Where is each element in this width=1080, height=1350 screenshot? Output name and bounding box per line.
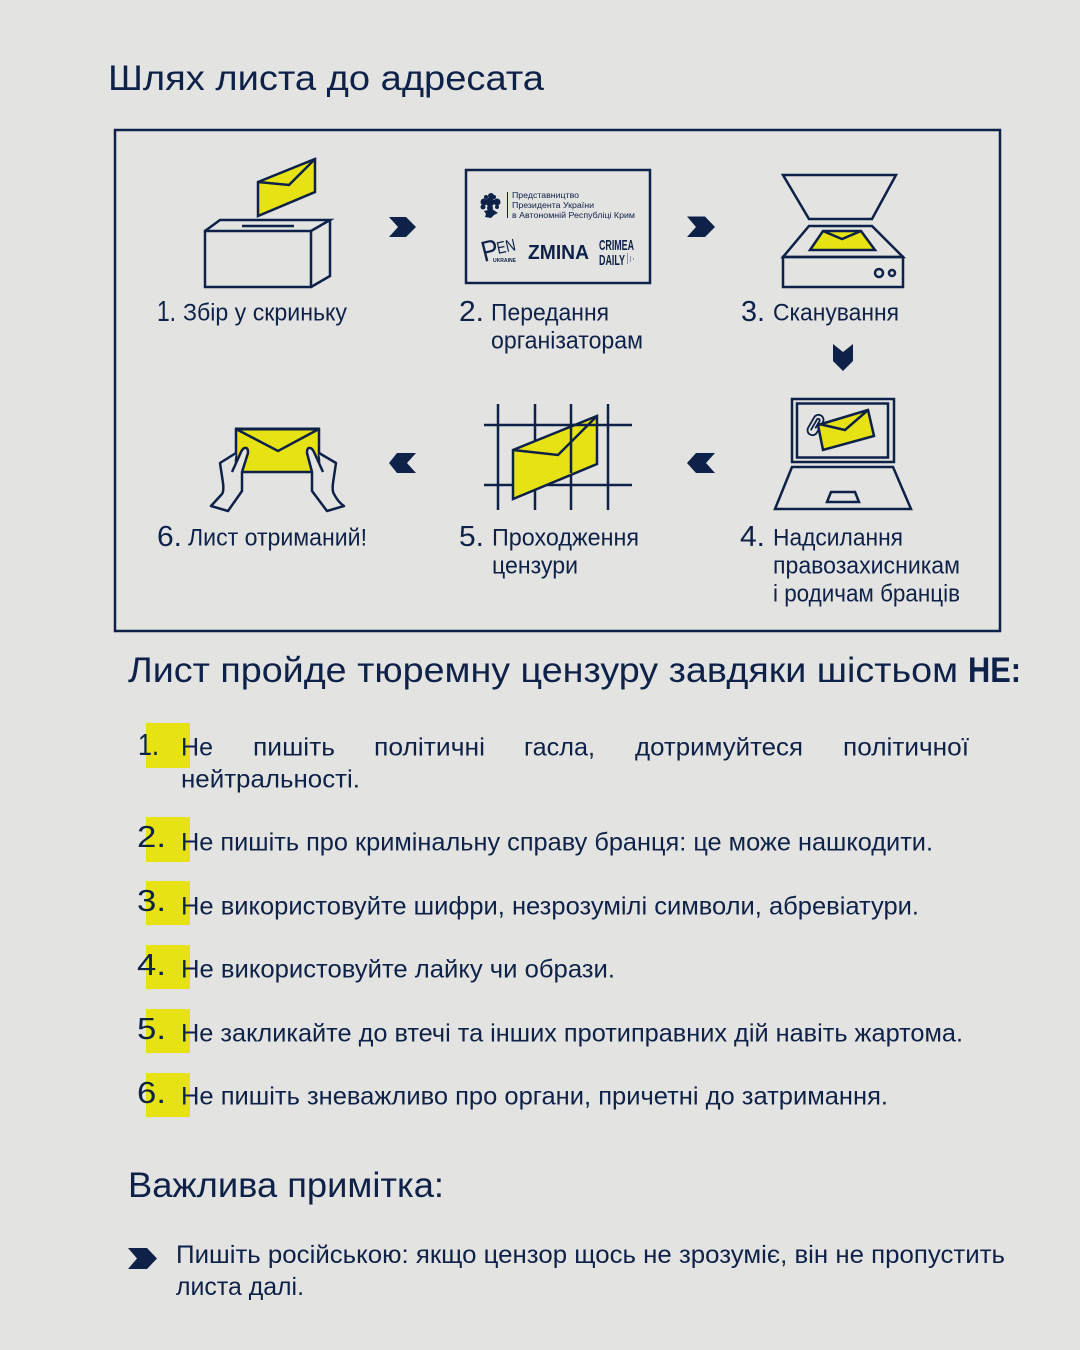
logo: Crimea Daily [599,237,634,269]
rule 1 [138,723,969,794]
rule 4 [137,945,615,989]
rule 6: Не пишіть зневажливо про органи, причетні до затримання. [181,1082,888,1110]
logo panel: organizers [466,170,650,283]
rule 1: нейтральності. [181,766,360,794]
logo: Crimea Daily: CRIMEA [599,237,634,254]
arrow: note bullet [128,1248,157,1269]
arrow: step 5 to 6 [389,453,416,473]
step 1 label: 1. [157,296,176,328]
rule 2: Не пишіть про кримінальну справу бранця: це може нашкодити. [181,828,933,856]
step 2 label [459,296,643,354]
heading: six rules: НЕ: [968,651,1021,690]
rule 3: Не використовуйте шифри, незрозумілі символи, абревіатури. [181,892,919,920]
rule 1: 1. [138,727,159,762]
step 4 label: правозахисникам [773,552,960,580]
step 4 label: 4. [740,521,765,553]
arrow: step 3 to 4 [833,344,853,371]
icon: scanner [783,175,903,287]
step 4 label: і родичам бранців [773,580,960,608]
panel: letter path [115,130,1000,631]
note text [176,1241,1005,1301]
title: Шлях листа до адресата [108,59,545,98]
step 2 label: Передання [491,300,609,326]
arrow: step 1 to 2 [389,217,416,237]
step 4 label: Надсилання [773,524,903,552]
rule 4: Не використовуйте лайку чи образи. [181,956,615,984]
rule 6 [137,1073,888,1117]
rule 5: 5. [137,1011,166,1046]
rule 2: 2. [137,819,166,854]
logo: representation emblem [480,193,500,218]
icon: envelope behind censorship grid [484,404,632,510]
logo: Crimea Daily: DAILY [599,252,625,269]
logo: ZMINA: ZMINA [528,242,589,264]
step 5 label: 5. [459,521,484,553]
step 3 label: Сканування [773,300,899,326]
step 2 label: організаторам [491,328,643,354]
rule 1: гасла, [524,734,595,762]
step 3 label [741,296,899,328]
step 5 label [459,521,639,580]
step 6 label: Лист отриманий! [188,524,367,552]
step 3 label: 3. [741,296,765,328]
logo: PEN Ukraine: UKRAINE [493,258,517,264]
arrow: step 2 to 3 [687,216,715,237]
step 5 label: цензури [492,552,578,580]
step 5 label: Проходження [492,524,639,552]
note text: листа далі. [176,1273,304,1301]
logo text: representation [512,191,635,220]
rule 6: 6. [137,1075,166,1110]
rule 3: 3. [137,883,166,918]
logo text: representation: Представництво [512,191,580,200]
rule 1: політичні [374,734,485,762]
icon: ballot box with envelope [205,159,330,287]
step 6 label [157,521,367,553]
logo: PEN Ukraine: EN [495,235,517,258]
logo: PEN Ukraine [478,234,517,269]
rule 2 [137,817,933,862]
step 6 label: 6. [157,521,182,553]
rule 4: 4. [137,947,166,982]
heading: important note: Важлива примітка: [128,1166,444,1205]
step 4 label [740,521,960,608]
rule 1: Не [181,734,213,762]
step 2 label: 2. [459,296,484,328]
logo text: representation: Президента України [512,201,594,210]
rule 5: Не закликайте до втечі та інших протиправних дій навіть жартома. [181,1020,963,1048]
arrow: step 4 to 5 [687,453,715,473]
icon: hands holding envelope [211,429,344,511]
rule 5 [137,1009,963,1053]
rule 1: пишіть [253,734,335,762]
rule 1: політичної [843,734,969,762]
rule 1: дотримуйтеся [635,734,803,762]
logo text: representation: в Автономній Республіці Крим [512,211,635,220]
icon: laptop with envelope [775,399,911,509]
rule 3 [137,881,919,925]
heading: six rules: Лист пройде тюремну цензуру завдяки шістьом [128,651,958,690]
note text: Пишіть російською: якщо цензор щось не зрозуміє, він не пропустить [176,1241,1005,1269]
step 1 label: Збір у скриньку [183,300,347,326]
logo: PEN Ukraine: P [478,234,502,269]
